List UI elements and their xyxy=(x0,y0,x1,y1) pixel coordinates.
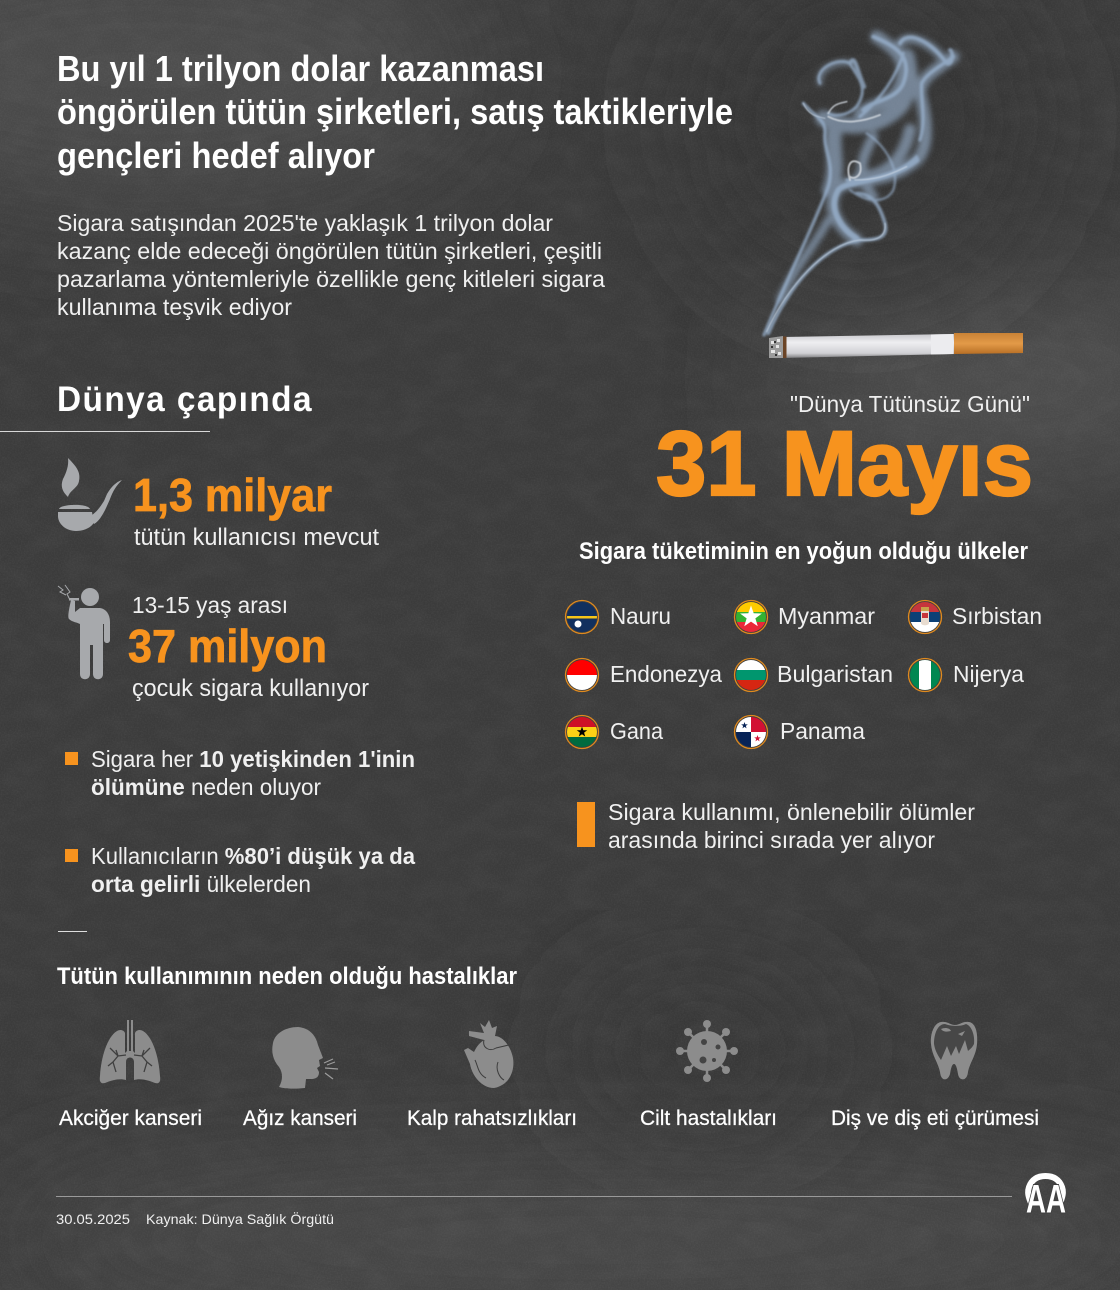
flag: Nigeria xyxy=(908,658,942,692)
icon: heart xyxy=(464,1020,513,1088)
heading: diseases: Tütün kullanımının neden olduğu hastalıklar xyxy=(57,963,517,990)
bullet: income xyxy=(65,843,415,897)
footer: date and source: 30.05.2025 xyxy=(56,1211,130,1227)
title: gençleri hedef alıyor xyxy=(57,135,375,176)
icon: lungs xyxy=(100,1020,160,1083)
stat: 1,3 milyar xyxy=(133,469,379,551)
logo: AA: AA xyxy=(1026,1178,1066,1222)
flag: Bulgaria xyxy=(734,658,768,692)
callout: preventable deaths: Sigara kullanımı, önlenebilir ölümler xyxy=(608,799,975,825)
stat: 1,3 milyar: 1,3 milyar xyxy=(133,469,332,521)
callout: Dünya Tütünsüz Günü date: "Dünya Tütünsüz Günü" xyxy=(790,391,1030,417)
intro paragraph: pazarlama yöntemleriyle özellikle genç kitleleri sigara xyxy=(57,266,605,292)
callout: Dünya Tütünsüz Günü date: 31 Mayıs xyxy=(656,413,1033,515)
disease labels: Kalp rahatsızlıkları xyxy=(407,1107,577,1130)
illustration: cigarette xyxy=(769,333,1023,358)
label: Serbia: Sırbistan xyxy=(952,603,1042,629)
flag: Panama xyxy=(734,716,768,748)
intro paragraph: Sigara satışından 2025'te yaklaşık 1 trilyon dolar xyxy=(57,210,553,236)
flag: Indonesia xyxy=(566,658,598,692)
icon: smoking child xyxy=(58,585,110,679)
footer: date and source xyxy=(56,1210,334,1227)
flag: Serbia xyxy=(908,600,942,634)
callout: preventable deaths: arasında birinci sırada yer alıyor xyxy=(608,827,935,853)
title xyxy=(57,48,733,176)
intro paragraph: kullanıma teşvik ediyor xyxy=(57,294,292,320)
flag: Nauru xyxy=(566,600,598,634)
icon: tooth xyxy=(931,1022,977,1079)
disease labels xyxy=(59,1107,1039,1130)
footer: date and source: Kaynak: Dünya Sağlık Örgütü xyxy=(146,1210,334,1227)
bullet: deaths: Sigara her 10 yetişkinden 1'inin xyxy=(91,746,415,772)
label: Nauru: Nauru xyxy=(610,603,671,629)
bullet: deaths xyxy=(65,746,415,800)
intro paragraph: kazanç elde edeceği öngörülen tütün şirketleri, çeşitli xyxy=(57,238,602,264)
icon: head with mouth xyxy=(272,1027,338,1089)
label: Myanmar: Myanmar xyxy=(778,603,875,629)
heading: countries: Sigara tüketiminin en yoğun olduğu ülkeler xyxy=(579,538,1028,565)
disease labels: Cilt hastalıkları xyxy=(640,1107,777,1130)
section heading: Dünya çapında: Dünya çapında xyxy=(57,380,313,419)
label: Bulgaria: Bulgaristan xyxy=(777,661,893,687)
bullet: income: orta gelirli ülkelerden xyxy=(91,871,311,897)
icon: virus xyxy=(676,1020,738,1082)
flag: Ghana xyxy=(566,716,598,748)
icon: pipe xyxy=(58,458,122,531)
bullet: income: Kullanıcıların %80’i düşük ya da xyxy=(91,843,415,869)
disease labels: Akciğer kanseri xyxy=(59,1107,202,1130)
title: Bu yıl 1 trilyon dolar kazanması xyxy=(57,48,544,89)
disease labels: Ağız kanseri xyxy=(243,1107,357,1130)
title: öngörülen tütün şirketleri, satış taktikleriyle xyxy=(57,91,733,132)
disease labels: Diş ve diş eti çürümesi xyxy=(831,1107,1039,1130)
label: Ghana: Gana xyxy=(610,718,663,744)
stat: 1,3 milyar: tütün kullanıcısı mevcut xyxy=(134,524,379,551)
label: Panama: Panama xyxy=(780,718,865,744)
stat: 37 milyon: çocuk sigara kullanıyor xyxy=(132,675,369,702)
stat: 37 milyon: 37 milyon xyxy=(128,620,327,672)
stat: 37 milyon xyxy=(128,592,369,702)
intro paragraph xyxy=(57,210,605,320)
illustration: smoke xyxy=(764,37,953,335)
label: Nigeria: Nijerya xyxy=(953,661,1024,687)
logo: AA xyxy=(1026,1176,1066,1222)
flag: Myanmar xyxy=(734,600,768,634)
callout: preventable deaths xyxy=(577,799,975,853)
label: Indonesia: Endonezya xyxy=(610,661,722,687)
stat: 37 milyon: 13-15 yaş arası xyxy=(132,592,288,618)
bullet: deaths: ölümüne neden oluyor xyxy=(91,774,321,800)
